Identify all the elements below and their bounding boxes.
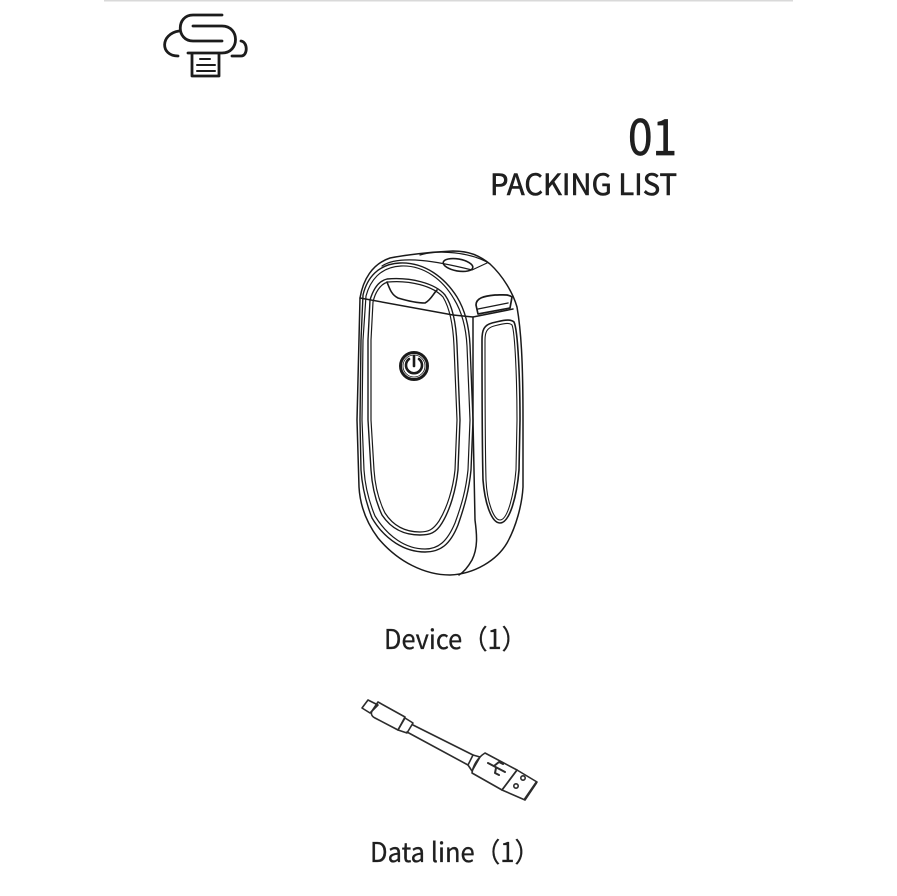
illustration: device — [357, 251, 523, 575]
micro connector tip — [362, 700, 378, 713]
front middle band — [368, 279, 460, 535]
front outer band — [360, 263, 473, 552]
device seam line — [360, 298, 513, 317]
illustration: data line cable — [362, 700, 537, 800]
heading: section number: 01 — [628, 98, 677, 170]
side panel — [482, 320, 520, 523]
USB housing — [472, 753, 517, 790]
side slot — [476, 295, 512, 314]
USB metal plug — [502, 770, 537, 800]
top button — [442, 256, 474, 274]
body divider curve — [459, 317, 477, 575]
caption: device: Device（1） — [384, 618, 527, 657]
strain relief — [398, 718, 413, 733]
caption: data line: Data line（1） — [370, 831, 540, 870]
heading: packing list: PACKING LIST — [490, 162, 677, 204]
recess at top of front panel — [387, 282, 437, 303]
micro connector housing — [371, 702, 405, 730]
USB symbol — [488, 762, 505, 775]
icon: paperclip cloud document logo — [165, 15, 246, 76]
USB collar — [468, 755, 480, 771]
power button — [400, 352, 428, 380]
device outer shell — [357, 251, 523, 575]
cable — [407, 725, 473, 765]
